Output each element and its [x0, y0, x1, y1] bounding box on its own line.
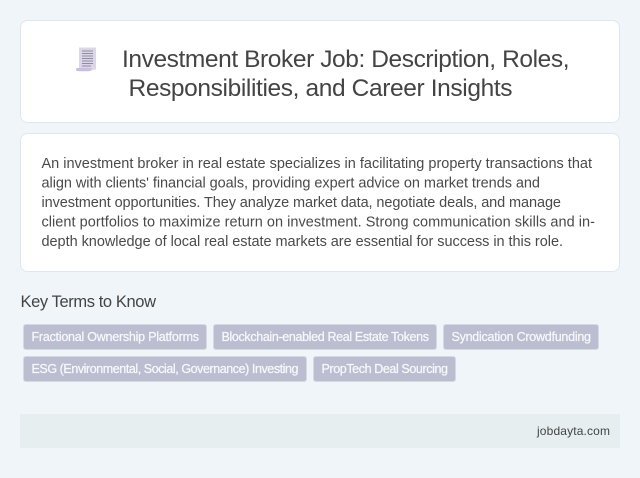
panel: title header [20, 20, 620, 122]
description text: depth knowledge of local real estate markets are essential for success in this role. [42, 234, 563, 250]
panel: description [20, 134, 620, 272]
description text: client portfolios to maximize return on investment. Strong communication skills and in- [42, 214, 595, 230]
tag: esg investing: ESG (Environmental, Social, Governance) Investing [32, 362, 299, 376]
description text: An investment broker in real estate specializes in facilitating property transactions that [42, 156, 592, 172]
heading: key terms: Key Terms to Know [20, 293, 156, 311]
tag: syndication crowdfunding [444, 324, 598, 350]
tag: blockchain tokens: Blockchain-enabled Real Estate Tokens [222, 330, 429, 344]
icon: document scroll [76, 48, 96, 71]
key term tags [24, 324, 598, 382]
description text: align with clients' financial goals, providing expert advice on market trends and [42, 176, 540, 192]
title: Responsibilities, and Career Insights [128, 75, 512, 102]
description text: investment opportunities. They analyze market data, negotiate deals, and manage [42, 195, 561, 211]
footer bar [20, 414, 620, 448]
title: Investment Broker Job: Description, Roles, [122, 46, 570, 73]
tag: syndication crowdfunding: Syndication Crowdfunding [452, 330, 591, 344]
footer source text: jobdayta.com [536, 424, 610, 438]
description text [42, 156, 595, 250]
tag: esg investing [24, 356, 306, 382]
tag: proptech: PropTech Deal Sourcing [322, 362, 448, 376]
title [122, 46, 570, 102]
tag: fractional ownership [24, 324, 206, 350]
tag: blockchain tokens [214, 324, 436, 350]
tag: fractional ownership: Fractional Ownership Platforms [32, 330, 199, 344]
tag: proptech [314, 356, 456, 382]
